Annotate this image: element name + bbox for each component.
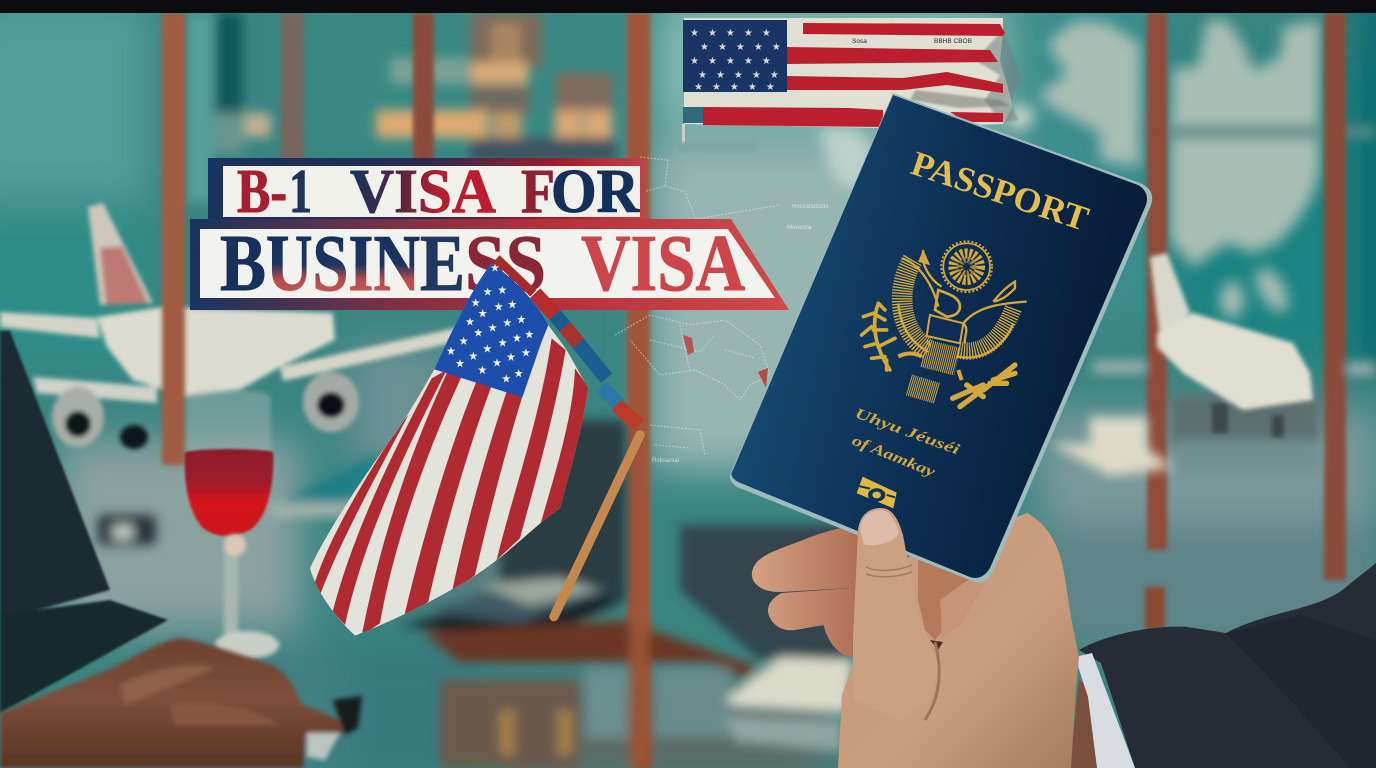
map small labels: Rocsaltattatts [792,204,828,210]
flag stars [447,263,534,383]
banner top frame [208,158,645,220]
title line two [220,218,745,308]
map markers [683,335,768,388]
hand on laptop [0,638,362,768]
title line two: SS [465,218,546,308]
left continent [1040,20,1140,167]
claw branch band [898,353,962,380]
right suit sleeve [1070,563,1376,768]
banner lower panel [200,229,775,298]
top black bar [0,0,1376,13]
blurred airplane right [1150,253,1313,437]
top flag shelf [678,124,756,152]
map small labels: Robsarsai [652,458,679,464]
pole ribbon [497,258,638,425]
top flag torn edge [975,30,1022,122]
map small labels [652,204,828,464]
banner top panel [223,166,640,217]
top flag small print: BBHB CBOB [934,38,972,45]
blurred airplane left [0,203,460,449]
right wing [958,282,1027,358]
top flag shading [910,90,1010,108]
knuckle crease [866,565,912,577]
top flag stars: ★★★★★ [698,70,788,81]
title banner [190,158,789,310]
title line one: B- [237,158,287,226]
title line one: 1 [289,158,312,226]
wine [185,449,273,536]
title line two: B [220,218,266,308]
top flag canton [683,20,787,92]
small flag at top [678,18,1022,152]
passport eagle emblem [862,241,1027,407]
top flag small print [852,38,972,45]
map small labels: Mowsora [787,225,812,231]
map shapes on the wall [820,20,1320,318]
sleeve fold [1226,615,1376,768]
thumbnail [860,510,899,545]
palm shading [925,642,939,720]
top flag stars: ★★★★★ [690,56,780,67]
stem and foot [215,534,279,659]
body stripes [924,353,957,362]
glass upper bowl [186,390,272,452]
top flag stars: ★★★★★ [694,82,784,93]
passport [730,93,1152,582]
arrows [953,365,1015,407]
fingers [752,524,865,657]
top flag white field [684,18,1012,128]
flag stripes [314,338,589,636]
passport issuer text: of Aamkay [850,433,937,481]
hand behind passport [752,513,1079,768]
top flag stars: ★★★★★ [700,42,790,53]
olive branch [862,303,895,370]
passport issuer text [850,406,963,481]
right continent [1170,20,1320,267]
passport title: PASSPORT [906,144,1093,239]
table surface and desk shapes [98,360,1376,768]
flag field [310,264,588,636]
title line one: F [521,158,555,226]
title line one [237,158,640,226]
palm fold fingers [918,560,970,640]
title line two: USIN [266,218,420,308]
islands [1220,282,1244,318]
top flag stars: ★★★★★ [690,28,780,39]
laptop [0,331,168,713]
thumb over passport [853,508,939,720]
banner lower frame [190,219,789,310]
shield [927,315,963,343]
seal [941,241,992,292]
tail [909,385,937,393]
distant lights [186,13,616,203]
back of hand [838,513,1079,768]
top flag stars [690,28,790,93]
top flag small print: Sosa [852,38,867,45]
title line one: VISA [350,158,496,226]
shirt cuff [1075,653,1135,768]
large American flag on pole [300,255,640,645]
wine glass [185,390,279,659]
left wing [898,250,942,352]
passport cover [730,93,1152,582]
title line one: OR [551,158,640,226]
title line two: E [420,218,465,308]
top flag stripes [703,23,1005,127]
title line two: VISA [581,218,745,308]
passport chip symbol [857,477,897,508]
flag canton [433,262,548,397]
flag pole [554,435,640,617]
wrist [1070,680,1100,768]
eagle head [935,290,960,317]
faint map overlay lines [615,157,780,455]
passport issuer text: Uhyu Jéuséi [853,406,963,459]
map band [1145,125,1376,139]
